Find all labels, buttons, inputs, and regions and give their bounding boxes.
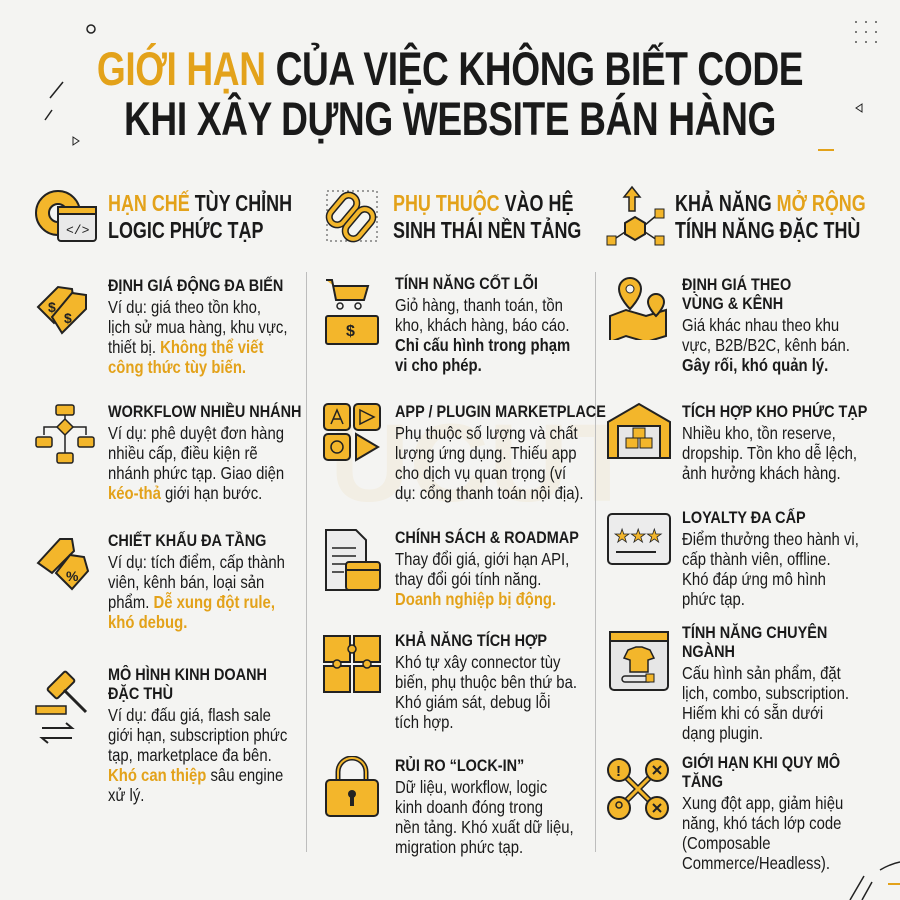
icon: warehouse bbox=[607, 402, 671, 459]
column divider lines bbox=[306, 272, 307, 852]
item: kha nang tich hop bbox=[395, 631, 577, 732]
item: dinh gia theo vung: VÙNG & KÊNH bbox=[682, 294, 783, 313]
item: tinh nang chuyen nganh bbox=[682, 623, 849, 743]
item: tinh nang chuyen nganh: NGÀNH bbox=[682, 642, 735, 661]
icon: price tags: $ bbox=[64, 310, 72, 326]
item: tich hop kho: dropship. Tồn kho dễ lệch, bbox=[682, 443, 857, 463]
item: app marketplace: cho dịch vụ quan trọng (ví bbox=[395, 463, 566, 483]
item: chinh sach bbox=[395, 528, 579, 609]
item: lock-in: RỦI RO “LOCK-IN” bbox=[395, 756, 524, 775]
icon: discount tags bbox=[36, 538, 90, 590]
icon: gear code bbox=[35, 190, 97, 242]
item: tinh nang chuyen nganh: Cấu hình sản phẩm, đặt bbox=[682, 663, 841, 683]
item: chiet khau bbox=[108, 531, 285, 632]
header: column 2 bbox=[326, 190, 581, 243]
icon: flowchart bbox=[35, 404, 95, 464]
item: chiet khau: viên, kênh bán, loại sản bbox=[108, 572, 264, 592]
item: kha nang tich hop: biến, phụ thuộc bên thứ ba. bbox=[395, 672, 577, 692]
item: mo hinh kinh doanh: Khó can thiệp sâu engine bbox=[108, 765, 283, 785]
item: dinh gia dong: thiết bị. Không thể viết bbox=[108, 337, 263, 357]
item: loyalty: Khó đáp ứng mô hình bbox=[682, 569, 826, 589]
icon: star card bbox=[607, 513, 671, 565]
item: chiet khau: Ví dụ: tích điểm, cấp thành bbox=[108, 552, 285, 572]
item: gioi han quy mo: (Composable bbox=[682, 833, 770, 853]
icon: browser shirt bbox=[609, 631, 669, 691]
item: gioi han quy mo: TĂNG bbox=[682, 772, 723, 791]
icon: discount tags: % bbox=[66, 568, 79, 584]
item: workflow: kéo-thả giới hạn bước. bbox=[108, 483, 262, 503]
item: tinh nang cot loi: TÍNH NĂNG CỐT LÕI bbox=[395, 274, 538, 293]
item: tinh nang chuyen nganh: Hiếm khi có sẵn dưới bbox=[682, 703, 823, 723]
item: app marketplace: Phụ thuộc số lượng và chất bbox=[395, 423, 578, 443]
icon: expand cube bbox=[606, 186, 664, 246]
item: dinh gia theo vung: ĐỊNH GIÁ THEO bbox=[682, 275, 791, 294]
item: tinh nang cot loi: kho, khách hàng, báo cáo. bbox=[395, 315, 570, 335]
item: lock-in: nền tảng. Khó xuất dữ liệu, bbox=[395, 817, 574, 837]
title: GIỚI HẠN CỦA VIỆC KHÔNG BIẾT CODE bbox=[97, 42, 803, 95]
heading: HẠN CHẾ TÙY CHỈNH bbox=[108, 190, 292, 216]
item: tich hop kho: TÍCH HỢP KHO PHỨC TẠP bbox=[682, 402, 867, 421]
header: column 3 bbox=[606, 186, 866, 246]
item: loyalty: LOYALTY ĐA CẤP bbox=[682, 508, 806, 527]
item: gioi han quy mo: Commerce/Headless). bbox=[682, 853, 830, 873]
item: tinh nang cot loi: vi cho phép. bbox=[395, 355, 482, 375]
heading: LOGIC PHỨC TẠP bbox=[108, 217, 263, 243]
item: mo hinh kinh doanh bbox=[108, 665, 287, 805]
item: dinh gia theo vung: Gây rối, khó quản lý. bbox=[682, 355, 828, 375]
item: dinh gia theo vung: vực, B2B/B2C, kênh bán. bbox=[682, 335, 850, 355]
item: mo hinh kinh doanh: MÔ HÌNH KINH DOANH bbox=[108, 665, 267, 684]
icon: price tags: $ bbox=[48, 299, 56, 315]
icon: document calendar bbox=[325, 529, 381, 591]
item: tinh nang chuyen nganh: TÍNH NĂNG CHUYÊN bbox=[682, 623, 827, 642]
item: tich hop kho bbox=[682, 402, 867, 483]
item: app marketplace: dụ: cổng thanh toán nội địa). bbox=[395, 483, 584, 503]
item: chinh sach: Doanh nghiệp bị động. bbox=[395, 589, 556, 609]
item: app marketplace: lượng ứng dụng. Thiếu app bbox=[395, 443, 577, 463]
decorative watermark: UCUT bbox=[330, 402, 636, 525]
icon: gear code: </> bbox=[66, 223, 90, 238]
item: dinh gia dong: công thức tùy biến. bbox=[108, 357, 246, 377]
item: kha nang tich hop: Khó tự xây connector tùy bbox=[395, 652, 560, 672]
icon: gavel bbox=[35, 670, 87, 744]
icon: cart cash bbox=[325, 279, 379, 345]
item: loyalty: cấp thành viên, offline. bbox=[682, 549, 831, 569]
item: dinh gia theo vung bbox=[682, 275, 850, 375]
icon: puzzle bbox=[323, 635, 381, 693]
item: dinh gia dong: Ví dụ: giá theo tồn kho, bbox=[108, 297, 261, 317]
item: gioi han quy mo: GIỚI HẠN KHI QUY MÔ bbox=[682, 753, 840, 772]
title bbox=[97, 42, 803, 145]
icon: scale nodes bbox=[607, 758, 669, 820]
item: app marketplace bbox=[395, 402, 606, 503]
item: lock-in: kinh doanh đóng trong bbox=[395, 797, 543, 817]
item: lock-in: Dữ liệu, workflow, logic bbox=[395, 777, 547, 797]
item: workflow bbox=[108, 402, 301, 503]
item: tinh nang chuyen nganh: lịch, combo, subscription. bbox=[682, 683, 849, 703]
item: dinh gia dong: lịch sử mua hàng, khu vực, bbox=[108, 317, 287, 337]
heading bbox=[108, 190, 292, 243]
item: tinh nang chuyen nganh: dạng plugin. bbox=[682, 723, 763, 743]
item: chinh sach: thay đổi gói tính năng. bbox=[395, 569, 541, 589]
item: gioi han quy mo: Xung đột app, giảm hiệu bbox=[682, 793, 843, 813]
item: mo hinh kinh doanh: giới hạn, subscription phức bbox=[108, 725, 287, 745]
item: workflow: nhiều cấp, điều kiện rẽ bbox=[108, 443, 258, 463]
item: mo hinh kinh doanh: tạp, marketplace đa bên. bbox=[108, 745, 272, 765]
item: tich hop kho: ảnh hưởng khách hàng. bbox=[682, 463, 841, 483]
item: kha nang tich hop: Khó giám sát, debug lỗi bbox=[395, 692, 550, 712]
item: loyalty: phức tạp. bbox=[682, 589, 745, 609]
item: mo hinh kinh doanh: xử lý. bbox=[108, 785, 144, 805]
item: tinh nang cot loi: Giỏ hàng, thanh toán, tồn bbox=[395, 295, 563, 315]
icon: price tags bbox=[36, 286, 87, 335]
title: KHI XÂY DỰNG WEBSITE BÁN HÀNG bbox=[124, 92, 776, 145]
item: dinh gia dong bbox=[108, 276, 287, 377]
item: chinh sach: Thay đổi giá, giới hạn API, bbox=[395, 549, 569, 569]
icon: chain link bbox=[326, 190, 378, 242]
item: mo hinh kinh doanh: ĐẶC THÙ bbox=[108, 684, 173, 703]
decoration bottom right bbox=[849, 861, 900, 900]
item: dinh gia dong: ĐỊNH GIÁ ĐỘNG ĐA BIẾN bbox=[108, 276, 283, 295]
heading: SINH THÁI NỀN TẢNG bbox=[393, 217, 581, 243]
heading bbox=[675, 190, 866, 243]
icon: scale nodes: ! bbox=[616, 763, 621, 780]
heading bbox=[393, 190, 581, 243]
item: workflow: WORKFLOW NHIỀU NHÁNH bbox=[108, 402, 301, 421]
item: lock-in: migration phức tạp. bbox=[395, 837, 523, 857]
item: loyalty bbox=[682, 508, 859, 609]
item: app marketplace: APP / PLUGIN MARKETPLACE bbox=[395, 402, 606, 421]
item: chinh sach: CHÍNH SÁCH & ROADMAP bbox=[395, 528, 579, 547]
item: gioi han quy mo: năng, khó tách lớp code bbox=[682, 813, 841, 833]
item: kha nang tich hop: KHẢ NĂNG TÍCH HỢP bbox=[395, 631, 547, 650]
item: lock-in bbox=[395, 756, 574, 857]
item: chiet khau: CHIẾT KHẤU ĐA TẦNG bbox=[108, 531, 266, 550]
item: tinh nang cot loi: Chỉ cấu hình trong phạm bbox=[395, 335, 570, 355]
item: tich hop kho: Nhiều kho, tồn reserve, bbox=[682, 423, 836, 443]
icon: padlock bbox=[325, 756, 379, 817]
item: gioi han quy mo bbox=[682, 753, 843, 873]
icon: app grid bbox=[323, 403, 381, 462]
item: workflow: Ví dụ: phê duyệt đơn hàng bbox=[108, 423, 284, 443]
icon: star card: ★★★ bbox=[614, 526, 662, 546]
item: chiet khau: phẩm. Dễ xung đột rule, bbox=[108, 592, 275, 612]
icon: cart cash: $ bbox=[346, 323, 355, 340]
item: dinh gia theo vung: Giá khác nhau theo khu bbox=[682, 315, 839, 335]
decorations bbox=[44, 21, 877, 151]
item: chiet khau: khó debug. bbox=[108, 612, 187, 632]
item: mo hinh kinh doanh: Ví dụ: đấu giá, flash sale bbox=[108, 705, 271, 725]
item: loyalty: Điểm thưởng theo hành vi, bbox=[682, 529, 859, 549]
header: column 1 bbox=[35, 190, 292, 243]
item: workflow: nhánh phức tạp. Giao diện bbox=[108, 463, 284, 483]
heading: TÍNH NĂNG ĐẶC THÙ bbox=[675, 217, 860, 243]
heading: PHỤ THUỘC VÀO HỆ bbox=[393, 190, 573, 216]
heading: KHẢ NĂNG MỞ RỘNG bbox=[675, 190, 866, 216]
item: tinh nang cot loi bbox=[395, 274, 570, 375]
icon: map pins bbox=[609, 277, 667, 340]
item: kha nang tich hop: tích hợp. bbox=[395, 712, 454, 732]
